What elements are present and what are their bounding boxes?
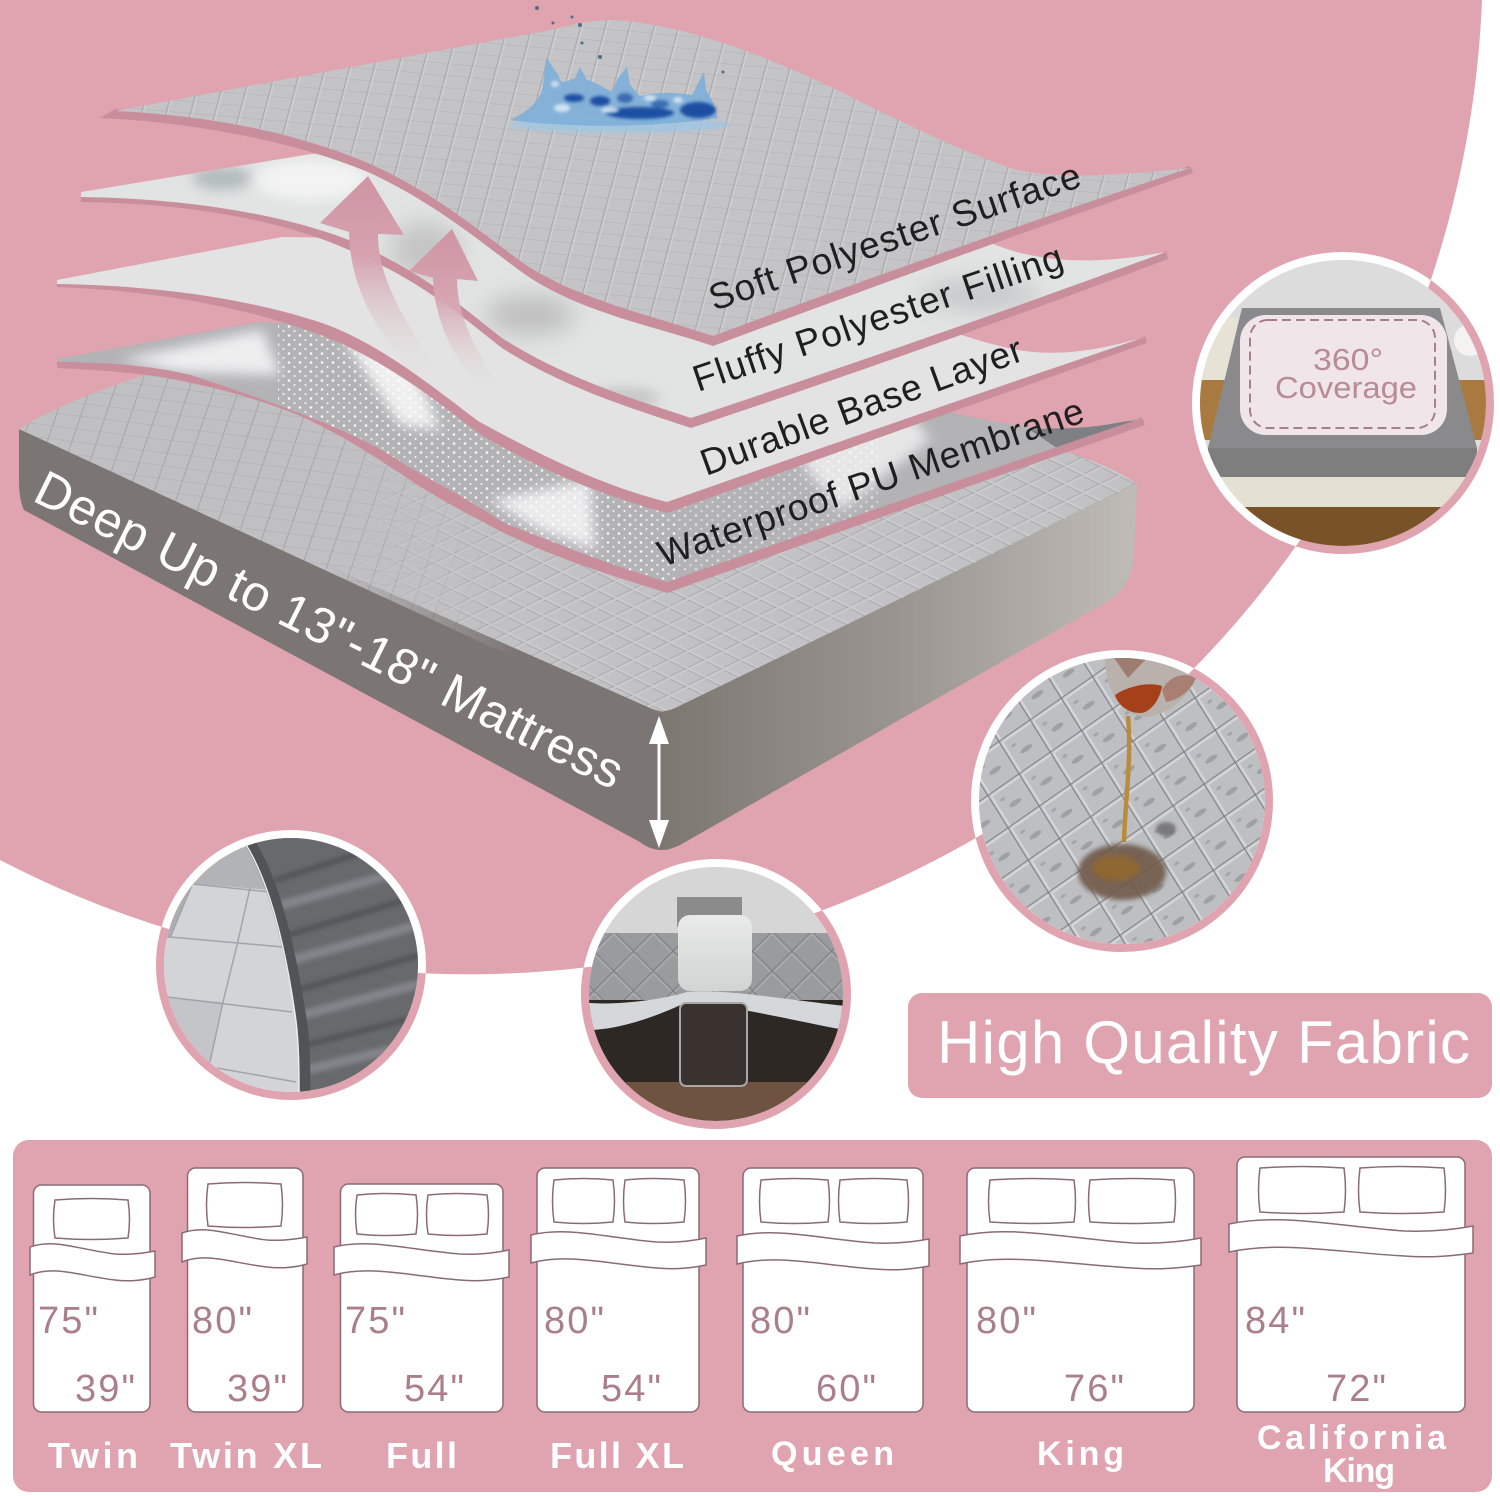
badge: high quality fabric (908, 993, 1492, 1098)
bed: twin xl: Twin XL (170, 1435, 322, 1476)
pink background shape (0, 0, 1482, 974)
bed: king: 80" (976, 1300, 1036, 1342)
bed: queen: 80" (750, 1300, 810, 1342)
bed: full (334, 1184, 509, 1476)
photo circle: 360 coverage (1190, 250, 1500, 560)
glass (677, 897, 742, 927)
bed: twin: 75" (38, 1300, 98, 1342)
bed: full: 54" (404, 1368, 464, 1410)
bed: full xl: 54" (601, 1368, 661, 1410)
mattress left side (19, 429, 662, 850)
bed: full: 75" (345, 1300, 405, 1342)
arrow: mattress height (649, 716, 669, 848)
bed: queen (737, 1168, 929, 1473)
photo circle: elastic edge (155, 830, 440, 1105)
badge: high quality fabric: High Quality Fabric (937, 1009, 1470, 1076)
bed: twin xl: 80" (192, 1300, 252, 1342)
bed: california king: California (1257, 1419, 1447, 1457)
bed: california king (1229, 1157, 1473, 1490)
label: waterproof PU membrane: Waterproof PU Membrane (652, 390, 1089, 575)
bed: california king: 84" (1245, 1300, 1305, 1342)
photo circle: 360 coverage: 360° (1313, 342, 1383, 377)
layer: waterproof PU membrane (57, 322, 1145, 593)
bed: full: Full (386, 1435, 457, 1476)
label: soft polyester surface: Soft Polyester Surface (703, 155, 1086, 319)
bed: twin xl (170, 1168, 322, 1476)
mattress quilted top left part (19, 376, 498, 650)
icon: water splash (510, 6, 730, 133)
bed: full xl (531, 1168, 706, 1476)
label: durable base layer: Durable Base Layer (695, 329, 1028, 484)
label: fluffy polyester filling: Fluffy Polyester Filling (687, 236, 1068, 400)
bed: full xl: 80" (544, 1300, 604, 1342)
photo circle: glass under sheet (580, 860, 855, 1132)
layer: durable base layer (57, 237, 1147, 513)
bed: king (960, 1168, 1201, 1473)
mattress right side (662, 484, 1137, 850)
360 coverage label (1240, 315, 1447, 435)
arrow: breathability small (409, 229, 500, 395)
bed: king: 76" (1064, 1368, 1124, 1410)
sheet lifted by glass (588, 991, 845, 1030)
photo circle: liquid spill (970, 650, 1280, 960)
bed: twin: 39" (75, 1368, 135, 1410)
bed: king: King (1037, 1435, 1124, 1473)
layer: soft polyester surface (100, 20, 1193, 346)
mattress depth label: Deep Up to 13"-18" Mattress (26, 460, 633, 800)
bed: twin xl: 39" (227, 1368, 287, 1410)
bed: california king: King (1323, 1452, 1395, 1490)
panel: bed sizes (13, 1140, 1492, 1492)
photo circle: 360 coverage: Coverage (1275, 370, 1417, 405)
mattress (19, 350, 1137, 850)
bed: full xl: Full XL (550, 1435, 684, 1476)
bed: queen: Queen (771, 1435, 894, 1473)
mattress quilted top (19, 350, 1137, 711)
bed: california king: 72" (1326, 1368, 1386, 1410)
bed: queen: 60" (816, 1368, 876, 1410)
bed: twin (30, 1185, 155, 1476)
layer: fluffy polyester filling (81, 150, 1168, 428)
arrow: breathability large (320, 176, 438, 378)
glass and hand (1105, 658, 1196, 717)
bed: twin: Twin (48, 1435, 138, 1476)
